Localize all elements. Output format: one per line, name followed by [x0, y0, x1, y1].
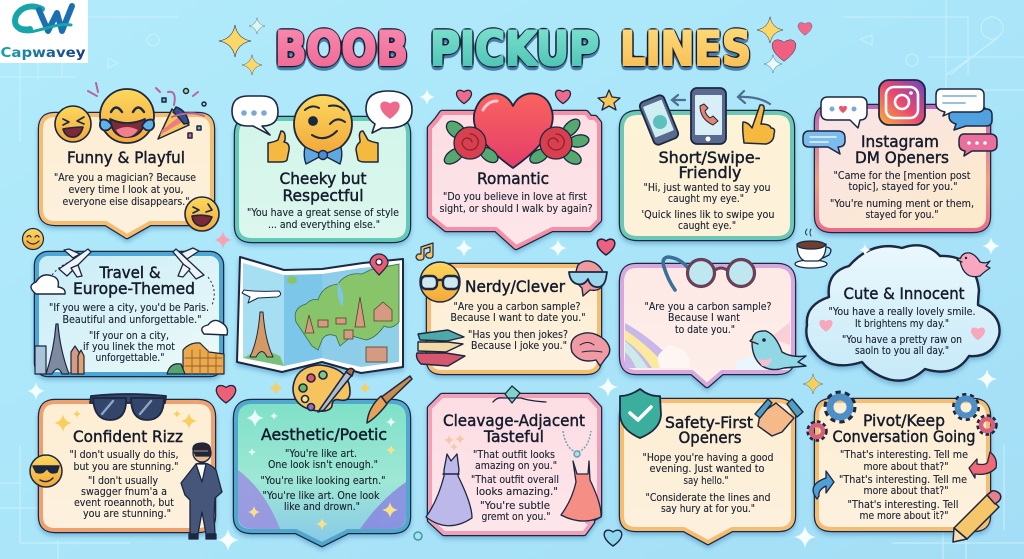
heading: Safety-First: [665, 413, 753, 432]
cloud shape: [806, 245, 1000, 381]
stars: [246, 409, 398, 530]
quote: "Do you believe in love at first: [443, 190, 588, 203]
panel: confident rizz: [30, 394, 222, 539]
quote: [644, 300, 772, 336]
quotes: "You're numing ment or them,: [830, 197, 974, 210]
heading: Tasteful: [483, 427, 544, 446]
speech bubble dots: [232, 96, 278, 135]
pointing hand: [743, 105, 775, 144]
smile emoji: [22, 228, 44, 250]
map sheet: [237, 257, 403, 373]
quotes: [830, 169, 974, 221]
round glasses: [663, 257, 754, 290]
rose right: [527, 116, 590, 167]
title: BOOB: [275, 22, 408, 77]
quotes: caught my eye.": [668, 192, 744, 205]
panel: funny and playful: [41, 83, 219, 236]
chat bubble white lines: [936, 89, 984, 116]
logo mark: [15, 6, 72, 32]
frame: [622, 113, 792, 238]
handshake: [755, 399, 803, 436]
party popper: [88, 83, 206, 139]
frame: [817, 401, 988, 529]
map pin: [370, 254, 388, 275]
sparkles: [444, 434, 465, 451]
sparkles: [54, 410, 197, 432]
heading: Instagram: [861, 132, 939, 151]
quotes: Beautiful and unforgettable.": [62, 313, 202, 326]
quotes: [828, 305, 976, 357]
quotes: "You're like art. One look: [262, 489, 380, 502]
heading: DM Openers: [855, 148, 949, 167]
pencil: [953, 491, 1001, 542]
cool emoji: [30, 455, 62, 487]
gear large: [826, 393, 854, 421]
chat bubble pink: [959, 134, 997, 156]
frame: [622, 266, 793, 385]
gold sparkle centre right: [803, 374, 823, 394]
logo wordmark: Capwavey: [0, 46, 86, 61]
quotes: [642, 451, 774, 515]
cloud hearts: [819, 320, 985, 340]
gear right: [954, 395, 978, 419]
small heart right of romantic: [556, 90, 570, 104]
map plane: [242, 290, 281, 303]
instagram icon: [879, 80, 925, 125]
heading: Travel &: [99, 263, 160, 282]
heading: Respectful: [282, 186, 364, 205]
quotes: "I don't usually: [88, 474, 158, 487]
quotes: [260, 447, 386, 513]
small heart left of romantic: [457, 90, 471, 104]
quotes: evening. Just wanted to: [650, 462, 765, 475]
frame: [41, 115, 212, 236]
quotes: "Are you a magician? Because: [54, 171, 196, 184]
panel: instagram dm openers: [803, 80, 997, 230]
quotes: amazing on you.": [475, 459, 557, 472]
heading: [665, 413, 753, 447]
heading: [658, 148, 760, 182]
panel: romantic: [430, 93, 599, 247]
quotes: topic], stayed for you.": [848, 180, 958, 193]
heading: [855, 132, 949, 167]
paintbrush: [367, 376, 412, 423]
quotes: like and drown.": [284, 500, 360, 513]
heading: Cleavage-Adjacent: [443, 411, 585, 430]
panel: europe map: [237, 254, 403, 373]
panel: cute and innocent cloud: [806, 245, 1000, 381]
frame: [237, 119, 408, 240]
quotes: It brightens my day.": [855, 317, 949, 330]
quotes: "That's interesting. Tell me: [840, 448, 968, 461]
quotes: [70, 448, 178, 520]
quote: sight, or should I walk by again?: [440, 202, 593, 215]
quotes: unforgettable.": [96, 351, 164, 364]
quotes: [450, 300, 586, 352]
heading: Confident Rizz: [73, 427, 183, 446]
necklace: [563, 431, 591, 457]
heading: [832, 411, 976, 446]
title: [275, 22, 751, 77]
quotes: 'Quick lines lik to swipe you: [642, 208, 774, 221]
quotes: "Are you a carbon sample?: [454, 300, 581, 313]
brain: [571, 333, 610, 366]
colosseum: [167, 343, 224, 374]
quotes: "Came for the [mention post: [834, 169, 971, 182]
tilted phone: [638, 94, 680, 146]
heart between rows: [216, 386, 236, 403]
heading: Cute & Innocent: [844, 284, 964, 303]
ornament: [493, 386, 546, 403]
quote: [440, 190, 593, 215]
heading: Nerdy/Clever: [465, 277, 565, 296]
book stack: [416, 330, 465, 366]
laughing emoji corner: [185, 197, 219, 231]
panel: travel and europe-themed: [31, 248, 227, 374]
quotes: "I don't usually do this,: [70, 448, 178, 461]
chat bubble hearts: [821, 97, 867, 128]
quotes: me more about it?": [860, 509, 948, 522]
panel: cleavage-adjacent tasteful: [426, 386, 601, 533]
quotes: more about that?": [864, 460, 948, 473]
heading: [73, 263, 195, 298]
quotes: more about that?": [864, 484, 948, 497]
quotes: "Hope you're having a good: [642, 451, 774, 464]
quotes: One look isn't enough.": [268, 458, 378, 471]
arrow pink: [969, 452, 996, 478]
heading: Openers: [678, 428, 742, 447]
title sparkles and hearts: [219, 17, 812, 75]
quotes: "You're like art.: [285, 447, 357, 460]
arrow blue: [813, 471, 834, 499]
heading: [280, 169, 366, 205]
heading: Europe-Themed: [73, 279, 195, 298]
rainbow clouds: [625, 322, 790, 370]
thumbs up icons: [268, 131, 378, 162]
quotes: Because I want to date you.": [450, 311, 586, 324]
heading: Cheeky but: [280, 169, 366, 188]
panel: aesthetic poetic: [236, 365, 412, 544]
wink emoji: [294, 95, 352, 153]
quotes: looks amazing.": [476, 485, 558, 498]
pink dress: [561, 461, 601, 521]
frame: [430, 396, 599, 533]
title: LINES: [620, 22, 751, 77]
panel: short swipe-friendly: [622, 88, 792, 238]
frame: [41, 402, 213, 530]
gear small left: [808, 422, 826, 440]
quotes: "That's interesting. Tell: [848, 498, 958, 511]
quotes: [471, 448, 559, 523]
map water and land: [243, 263, 399, 367]
rose left: [442, 118, 501, 167]
cloud left: [31, 275, 65, 294]
frame: [817, 107, 988, 230]
quotes: "Has you then jokes?: [468, 328, 568, 341]
laughing emoji big: [100, 89, 154, 143]
shield: [620, 389, 661, 438]
quotes: Because I joke you.": [471, 339, 567, 352]
heading: Friendly: [678, 163, 742, 182]
heading: [443, 411, 585, 446]
background sparkles: [27, 89, 1000, 551]
map landmarks: [305, 297, 392, 362]
small teal ring: [414, 532, 422, 540]
watercolor corners: [238, 470, 406, 529]
quotes: "That outfit looks: [473, 448, 555, 461]
panel: pivot keep conversation going: [808, 393, 1001, 542]
coffee cup: [795, 229, 831, 268]
quotes: "That outfit overall: [471, 473, 559, 486]
logo: [0, 0, 88, 63]
bird: [750, 331, 806, 370]
cloud right: [202, 320, 227, 335]
quotes: everyone eise disappears.": [62, 195, 190, 208]
quotes: "You're subtle: [480, 499, 550, 512]
quote: "Are you a carbon sample?: [644, 300, 772, 313]
chat bubble blue left: [803, 131, 845, 154]
quotes: every time I look at you,: [68, 183, 184, 196]
palette: [293, 365, 354, 412]
quotes: if you linek the mot: [83, 340, 176, 353]
gold sparkles above panel: [269, 381, 371, 395]
airplane right: [173, 248, 204, 279]
flight path: [52, 262, 214, 305]
quotes: [839, 448, 968, 522]
quotes: stayed for you.": [866, 208, 938, 221]
blue dress: [426, 454, 472, 526]
brain and glasses: [569, 261, 607, 296]
quotes: gremt on you.": [482, 510, 550, 523]
heading: Conversation Going: [832, 427, 976, 446]
quotes: "If your on a city,: [89, 329, 169, 342]
quotes: swagger fnum'a a: [81, 485, 167, 498]
frame: [430, 113, 599, 247]
airplane left: [59, 249, 91, 277]
big heart: [474, 93, 553, 168]
panel: cheeky but respectful: [232, 91, 412, 240]
pink sparkle: [214, 231, 232, 249]
quote: "You have a great sense of style: [247, 206, 399, 219]
heading: Aesthetic/Poetic: [261, 425, 387, 444]
quotes: caught eye.": [678, 219, 736, 232]
quotes: event roeannoth, but: [74, 496, 175, 509]
map eiffel: [250, 312, 273, 357]
quotes: "If you were a city, you'd be Paris.: [49, 301, 209, 314]
heading: Funny & Playful: [67, 148, 185, 167]
laughing emoji small: [55, 106, 91, 142]
gear small right: [978, 416, 996, 434]
blue heart: [604, 530, 622, 546]
quotes: "You have a pretty raw on: [842, 333, 962, 346]
quotes: "That's interesting. Tell me: [839, 473, 967, 486]
heading: Pivot/Keep: [863, 411, 945, 430]
quotes: "You're like looking eartn.": [260, 474, 386, 487]
quotes: saoln to you all day.": [855, 344, 949, 357]
quotes: you are stunning.": [83, 507, 171, 520]
man in suit: [181, 443, 222, 539]
frame: [236, 402, 408, 544]
heart above glasses panel: [597, 239, 615, 255]
bow tie: [304, 147, 342, 164]
quotes: "Hi, just wanted to say you: [644, 181, 770, 194]
panel: nerdy clever: [416, 261, 610, 372]
title: PICKUP: [430, 22, 599, 77]
swipe arrows: [672, 91, 770, 105]
phone with call icon: [691, 88, 726, 144]
quotes: [54, 171, 196, 208]
quote: [247, 206, 399, 231]
frame: [429, 266, 599, 372]
quotes: say hury at for you.": [661, 502, 755, 515]
quote: ... and everything else.": [268, 218, 380, 231]
music note: [416, 243, 433, 260]
speech bubble heart: [366, 91, 412, 133]
frame: [37, 254, 221, 374]
quotes: "Considerate the lines and: [646, 491, 770, 504]
heading: Romantic: [477, 169, 549, 188]
panel: round glasses card: [622, 257, 806, 385]
frame: [622, 401, 793, 542]
quotes: [642, 181, 774, 232]
quotes: say hello.": [684, 474, 728, 487]
quote: to date you.": [675, 323, 735, 336]
sunglasses: [90, 394, 166, 420]
chat bubble blue: [949, 109, 992, 130]
quotes: but you are stunning.": [74, 460, 178, 473]
pink bird: [957, 253, 990, 277]
quotes: "You have a really lovely smile.: [828, 305, 976, 318]
gold star: [598, 90, 620, 110]
eiffel tower and skyline: [35, 324, 84, 374]
panel: safety-first openers: [620, 389, 803, 542]
quotes: [49, 301, 209, 364]
quote: Because I want: [668, 311, 741, 324]
heading: Short/Swipe-: [658, 148, 760, 167]
nerd emoji: [420, 262, 460, 302]
